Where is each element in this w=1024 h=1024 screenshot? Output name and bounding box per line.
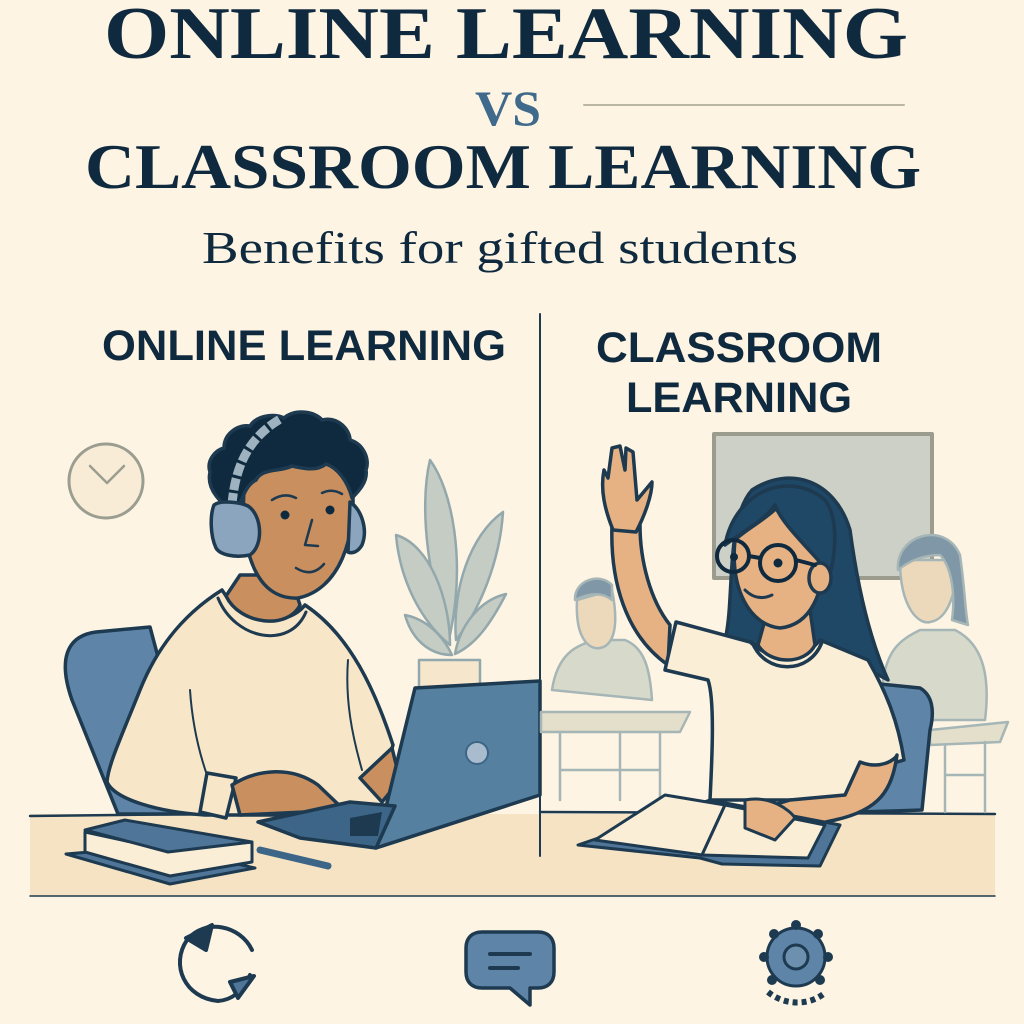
heading: classroom learning: [596, 324, 882, 422]
clock icon: [69, 444, 143, 518]
chair: [860, 684, 932, 812]
icon: speech bubble: [466, 932, 554, 1005]
ear: [809, 563, 831, 593]
background student left: [541, 579, 690, 800]
neck: [226, 575, 300, 621]
desk: left and right: [30, 812, 995, 896]
fringe: [725, 486, 835, 580]
title: classroom learning: CLASSROOM LEARNING: [85, 131, 921, 202]
forearm: [740, 755, 897, 838]
face: [734, 505, 825, 628]
hair back: [725, 478, 888, 680]
headband: [232, 418, 282, 505]
hand: [603, 446, 652, 532]
online student: [65, 412, 400, 818]
collar: [218, 598, 306, 636]
background student right: [880, 535, 1008, 812]
face: [243, 450, 353, 598]
chair: [65, 627, 200, 814]
sweater: [107, 590, 400, 815]
glasses: [717, 540, 815, 581]
laptop: [258, 681, 540, 848]
title rule: [584, 104, 904, 106]
books and pen: [66, 820, 328, 884]
heading: online learning: ONLINE LEARNING: [102, 322, 506, 370]
icon: cycle: [180, 925, 254, 1001]
left hand: [232, 772, 342, 815]
title: vs: VS: [475, 80, 541, 136]
subtitle: Benefits for gifted students: [202, 223, 798, 273]
arm raised: [612, 525, 670, 665]
neck: [758, 610, 815, 660]
cuff: [200, 773, 236, 818]
classroom student: [603, 446, 932, 838]
heading: classroom learning: LEARNING: [626, 374, 852, 422]
right hand: [360, 748, 400, 802]
divider: vertical: [539, 314, 541, 856]
baseline: [30, 895, 995, 897]
whiteboard: [714, 434, 932, 578]
curly hair: [209, 412, 367, 512]
collar: [752, 642, 822, 667]
headphones: [211, 502, 260, 556]
plant: [396, 460, 506, 700]
sleeve seams: [190, 660, 362, 778]
open book: [578, 795, 840, 866]
heading: classroom learning: CLASSROOM: [596, 324, 882, 372]
icon: gear: [759, 920, 833, 1002]
shirt: [665, 622, 904, 800]
eyes and mouth: [280, 506, 334, 520]
